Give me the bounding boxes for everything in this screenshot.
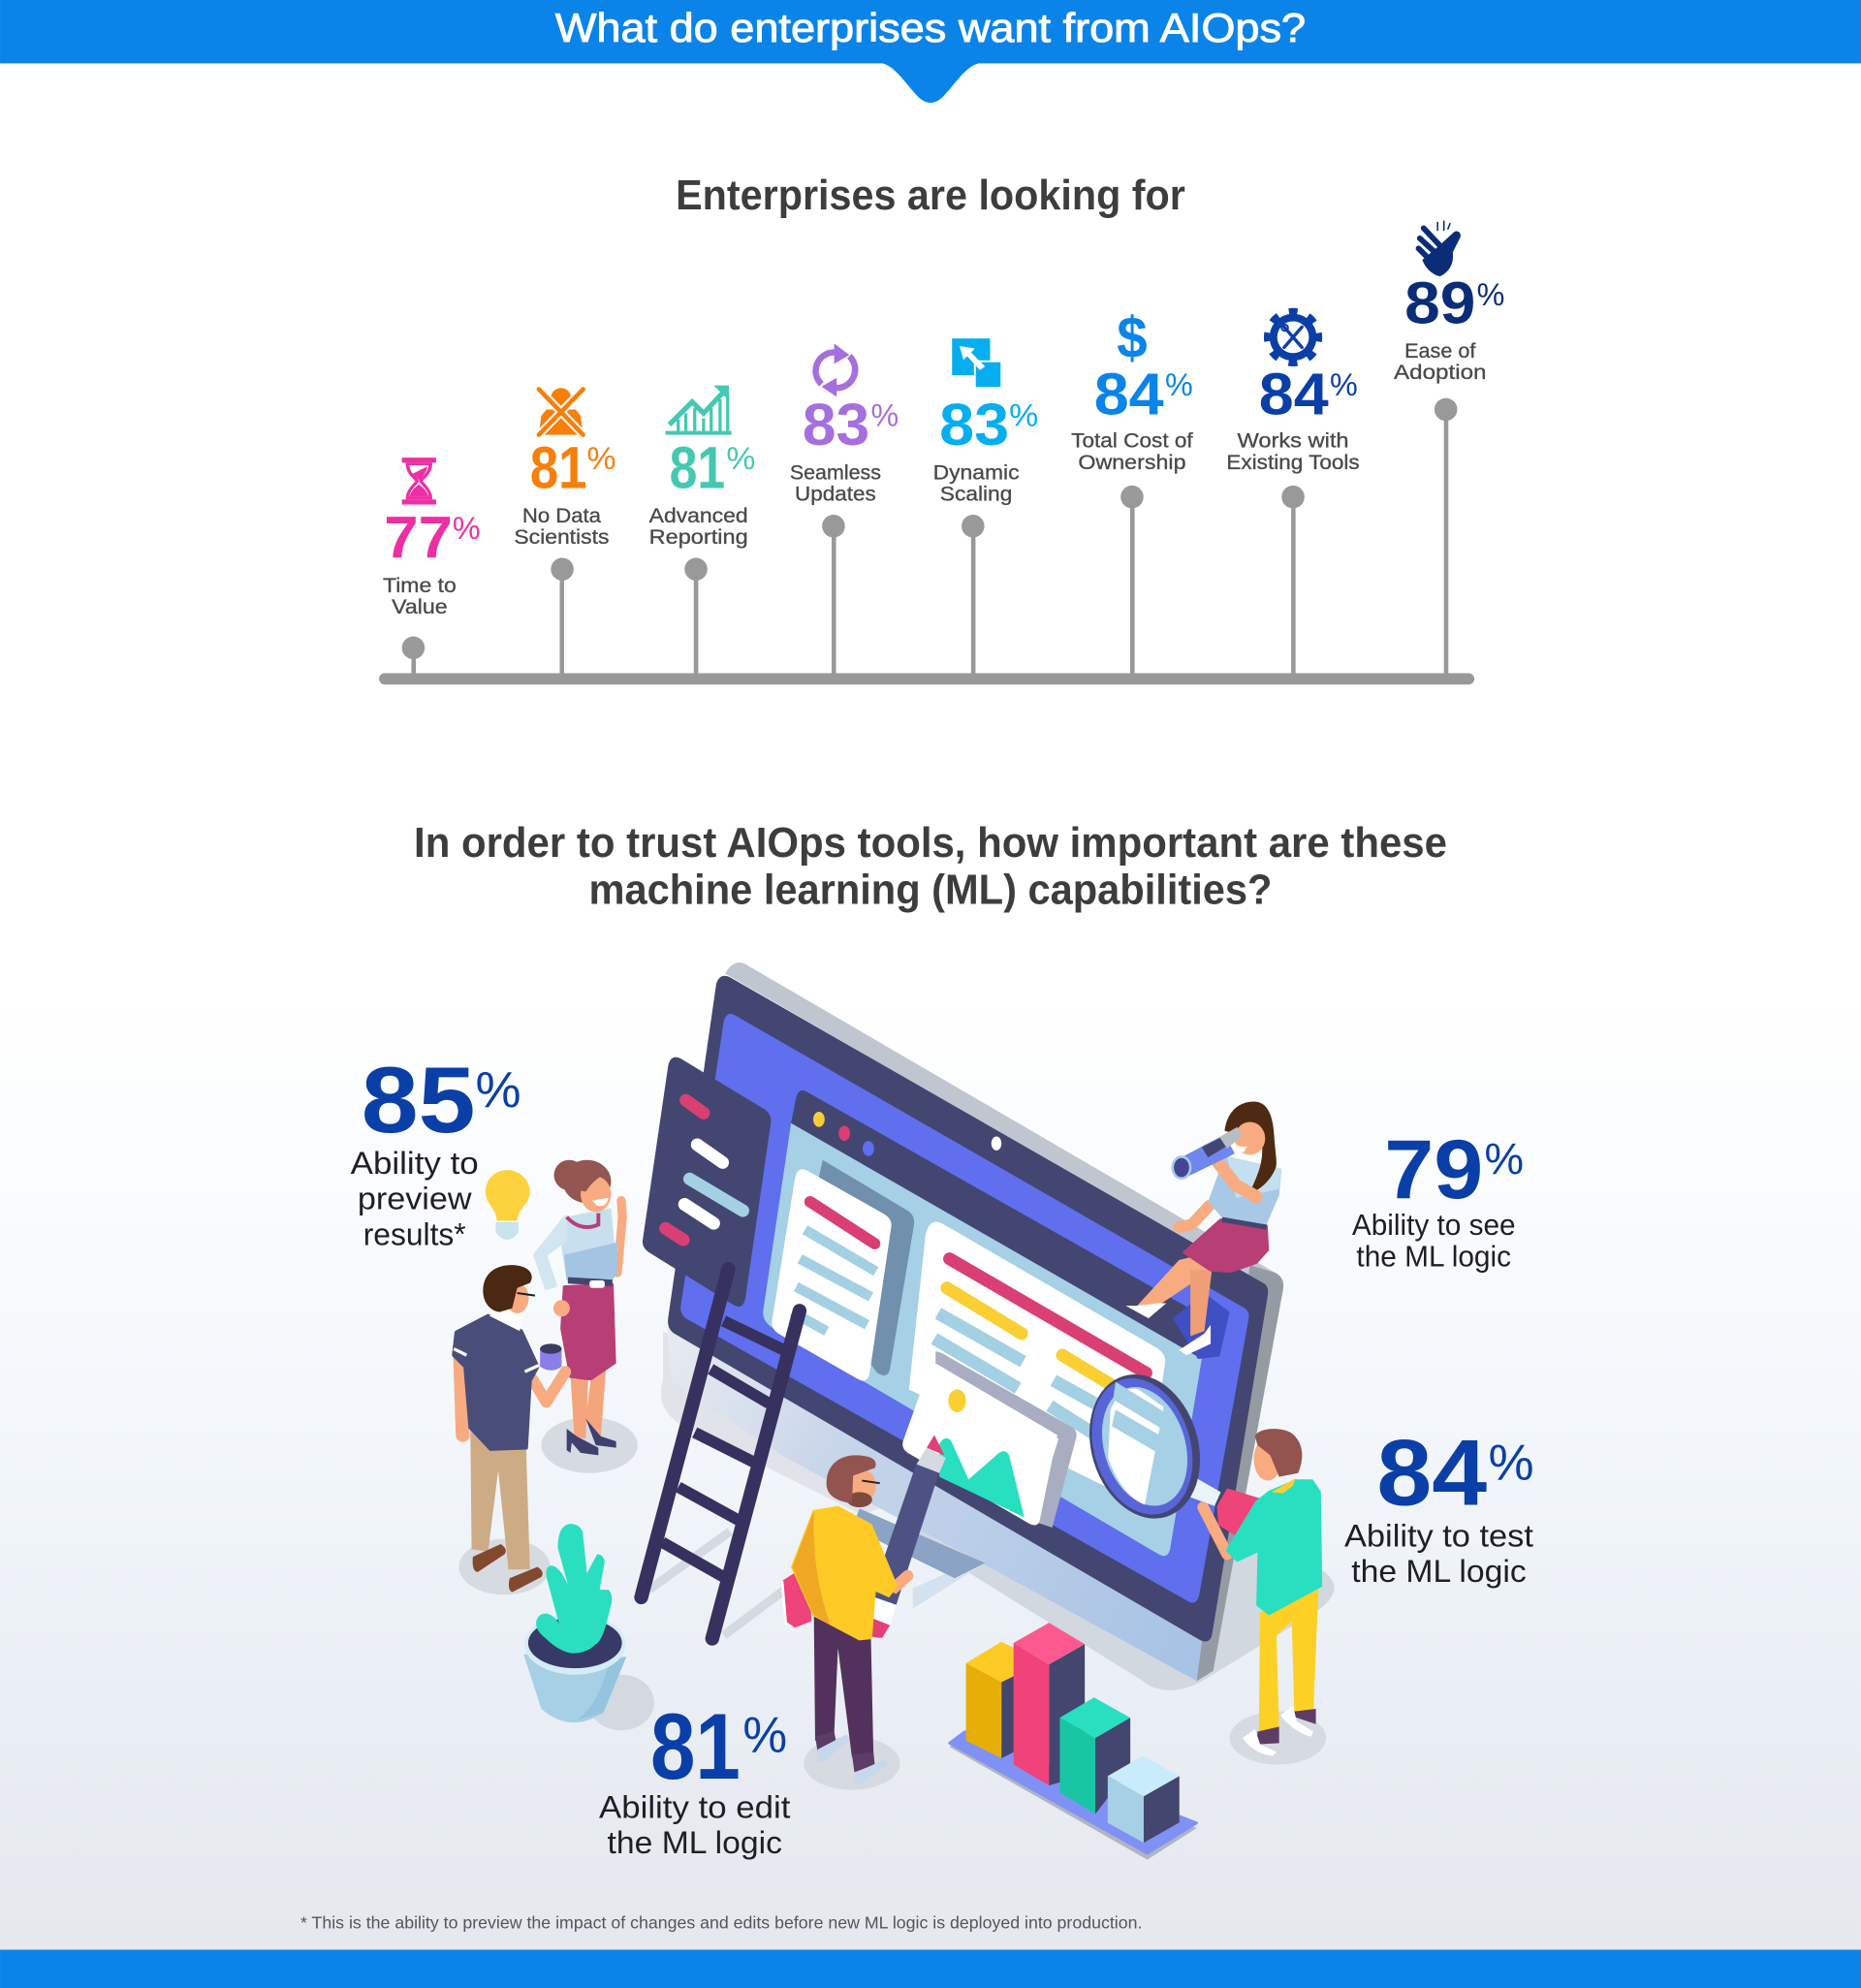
icon: hourglass [402,458,436,505]
hair [483,1265,532,1312]
metric: 84 percent works with existing tools [1226,311,1360,474]
title: What do enterprises want from AIOps? [555,5,1306,50]
trousers [1259,1590,1318,1734]
metric: 89 percent ease of adoption: 89 [1404,270,1475,337]
metric: 83 percent seamless updates: % [871,396,899,432]
metric: 81 percent no data scientists [514,388,616,549]
stat: 85 percent preview results: % [475,1062,521,1119]
glasses [518,1293,535,1296]
metric: 77 percent time to value: % [453,510,481,546]
icon: gear with tools [1267,311,1319,363]
pot [523,1655,626,1722]
metric: 81 percent advanced reporting: % [726,440,756,476]
metric: 89 percent ease of adoption: Ease of [1404,338,1476,363]
stat: 84 percent test the ml logic [1344,1419,1534,1589]
binoculars [1173,1127,1243,1179]
monitor underside [667,1326,1208,1681]
light bulb [486,1170,530,1240]
necklace collar [567,1214,598,1227]
book [782,1563,811,1627]
right arm [532,1372,565,1403]
metric: 83 percent dynamic scaling: 83 [939,392,1009,458]
metric: 81 percent no data scientists: No Data [522,503,601,527]
pencil [865,1436,946,1638]
metric: 84 percent works with existing tools: Works with [1238,428,1349,453]
beard [847,1492,872,1507]
metric: 83 percent seamless updates: 83 [803,392,869,458]
collar [1272,1478,1296,1494]
metric: 77 percent time to value [383,458,481,618]
metric: 77 percent time to value: Time to [383,573,457,597]
hair [1255,1429,1302,1477]
monitor side edge [1197,1265,1283,1681]
shoes [1243,1706,1313,1755]
reflected shadow [1173,1293,1230,1359]
metric: 84 percent works with existing tools: % [1330,366,1358,402]
stat: 84 percent test the ml logic: the ML logic [1351,1553,1527,1589]
shadow [541,1417,638,1473]
metric: 83 percent seamless updates [790,343,899,506]
shoes [567,1419,616,1455]
stat: 79 percent see the ml logic: the ML logic [1356,1242,1511,1274]
metric: 81 percent no data scientists: Scientists [514,524,609,549]
icon: crossed person [539,388,584,435]
pot shadow [588,1675,654,1730]
face [506,1283,528,1313]
metric: 77 percent time to value: Value [392,594,448,618]
picture card with chart [902,1351,1077,1528]
icon: growth chart [666,386,732,433]
metric: 81 percent advanced reporting: Reporting [649,524,748,549]
pin: seamless updates [822,515,845,675]
shadow [804,1737,900,1790]
metric: 89 percent ease of adoption: % [1477,276,1504,312]
man with magnifier [1203,1429,1326,1765]
legs [1137,1253,1214,1307]
hair [1224,1102,1277,1193]
monitor stand [913,1563,985,1609]
stat: 79 percent see the ml logic [1352,1123,1524,1274]
sleeve stripes [454,1349,539,1372]
legs [571,1369,606,1438]
pin: total cost of ownership [1120,486,1144,675]
metric: 83 percent dynamic scaling: Dynamic [933,459,1020,484]
metric: 81 percent no data scientists: % [587,440,616,476]
shoes [1125,1303,1211,1355]
icon: snapping hand [1419,221,1461,276]
heading: ml capabilities: machine learning (ML) capabilities? [589,868,1272,914]
metric: 83 percent dynamic scaling [933,338,1038,506]
sleeve [535,1217,565,1288]
face [1254,1437,1281,1481]
metric: 84 percent total cost of ownership [1071,305,1194,474]
icon: dollar sign: $ [1117,305,1148,370]
pants [470,1428,530,1569]
metric: 81 percent advanced reporting: 81 [670,435,725,502]
pin: advanced reporting [684,557,708,675]
blouse [1208,1156,1281,1224]
arm [1203,1507,1227,1554]
collar [489,1307,522,1331]
teal bar [1059,1697,1130,1814]
footer band [0,1950,1861,1988]
stat: 84 percent test the ml logic: % [1488,1435,1534,1491]
heading: enterprises are looking for: Enterprises are looking for [676,173,1185,219]
card shadow [799,1160,914,1375]
light blue bar [1108,1755,1180,1843]
left arm [460,1359,462,1436]
window body [763,1123,1202,1556]
monitor [643,962,1283,1681]
stat: 81 percent edit the ml logic: 81 [650,1693,741,1799]
skirt [561,1284,615,1379]
hand on hip [553,1300,570,1316]
shadow [1230,1712,1326,1765]
metric: 89 percent ease of adoption [1394,221,1504,384]
top [561,1208,617,1280]
hair [827,1455,876,1503]
stat: 85 percent preview results: preview [358,1181,472,1216]
monitor screen [680,1014,1249,1602]
shadow [458,1539,551,1594]
stat: 79 percent see the ml logic: Ability to see [1352,1210,1516,1242]
man with pencil [782,1455,907,1790]
main content card [909,1221,1165,1506]
header banner [0,0,1861,103]
face [1235,1121,1265,1154]
stat: 81 percent edit the ml logic: the ML logic [607,1824,782,1860]
metric: 89 percent ease of adoption: Adoption [1394,360,1487,384]
pin: no data scientists [551,557,574,675]
metric: 83 percent seamless updates: Seamless [790,459,881,484]
pink sleeve [1217,1488,1260,1537]
buckle [589,1280,605,1288]
metric: 84 percent total cost of ownership: % [1165,366,1193,402]
monitor top edge [725,962,1276,1288]
stat: 79 percent see the ml logic: 79 [1384,1123,1483,1216]
heading: ml capabilities: In order to trust AIOps tools, how important are these [414,820,1447,867]
illustration: isometric monitor scene [454,962,1334,1860]
face [581,1177,611,1212]
trousers [814,1615,873,1757]
belt [568,1280,613,1283]
mug [540,1343,561,1371]
stat: 79 percent see the ml logic: % [1485,1134,1524,1183]
metric: 81 percent no data scientists: 81 [530,435,587,502]
pin: ease of adoption [1435,398,1457,675]
icon: refresh arrows [816,343,855,396]
shoes [473,1544,543,1593]
yellow bar [966,1642,1014,1758]
hair and bun [554,1160,584,1190]
magnifying glass [1072,1361,1221,1532]
pin: time to value [402,637,425,675]
ladder [642,1269,800,1639]
woman with binoculars [1125,1102,1281,1359]
metric: 83 percent dynamic scaling: Scaling [940,482,1012,506]
icon: scaling squares [952,338,1001,388]
arm [874,1576,907,1587]
cuffs [815,1732,874,1772]
window dots [813,1112,1001,1156]
metric: 83 percent seamless updates: Updates [795,482,876,506]
fringe [573,1170,610,1191]
metric: 84 percent works with existing tools: Existing Tools [1226,450,1360,474]
sidebar panel [643,1057,771,1307]
ladder shadows [649,1531,785,1635]
pin: works with existing tools [1281,486,1305,675]
metric: 84 percent total cost of ownership: Total Cost of [1071,428,1194,453]
stat: 81 percent edit the ml logic: % [742,1707,787,1763]
belt [1222,1219,1267,1227]
stat: 84 percent test the ml logic: 84 [1376,1419,1487,1525]
stat: 81 percent edit the ml logic: Ability to edit [599,1788,790,1824]
arm [1179,1206,1210,1227]
monitor frame [668,976,1268,1642]
chart baseline [379,673,1474,684]
shirt [792,1507,897,1639]
leaves [536,1524,612,1654]
woman standing [535,1160,638,1473]
window title bar [791,1090,1221,1359]
glasses [862,1481,880,1483]
smile [592,1198,609,1206]
pink bar [1014,1623,1085,1785]
stat: 85 percent preview results: 85 [362,1047,475,1152]
cuffs [1256,1709,1316,1745]
lollipop chart [379,221,1504,684]
stat: 84 percent test the ml logic: Ability to test [1344,1518,1533,1554]
stat: 85 percent preview results [351,1047,521,1251]
face [848,1469,876,1502]
stat: 85 percent preview results: results* [363,1215,466,1251]
shoes [818,1734,889,1784]
skirt [1184,1219,1268,1272]
footnote: * This is the ability to preview the impact of changes and edits before new ML logic is deployed into production. [300,1912,1142,1932]
floor shadow of monitor [888,1508,1334,1690]
raised arm [617,1201,622,1273]
metric: 84 percent total cost of ownership: 84 [1094,362,1164,428]
pin: dynamic scaling [962,515,985,675]
metric: 83 percent dynamic scaling: % [1009,396,1038,432]
metric: 81 percent advanced reporting: Advanced [649,503,748,527]
shirt [454,1316,538,1449]
stat: 85 percent preview results: Ability to [351,1145,479,1181]
sweater [1227,1481,1321,1614]
bar chart 3d [950,1623,1197,1860]
forearm [1208,1150,1256,1197]
metric: 77 percent time to value: 77 [384,504,453,571]
chart base [950,1737,1197,1860]
stat: 81 percent edit the ml logic [599,1693,790,1860]
potted plant [523,1524,654,1730]
document card [772,1169,892,1381]
metric: 81 percent advanced reporting [649,386,756,549]
metric: 84 percent works with existing tools: 84 [1259,362,1329,428]
heading: ml capabilities [414,820,1447,914]
metric: 84 percent total cost of ownership: Ownership [1078,450,1186,474]
man with mug [454,1265,565,1594]
